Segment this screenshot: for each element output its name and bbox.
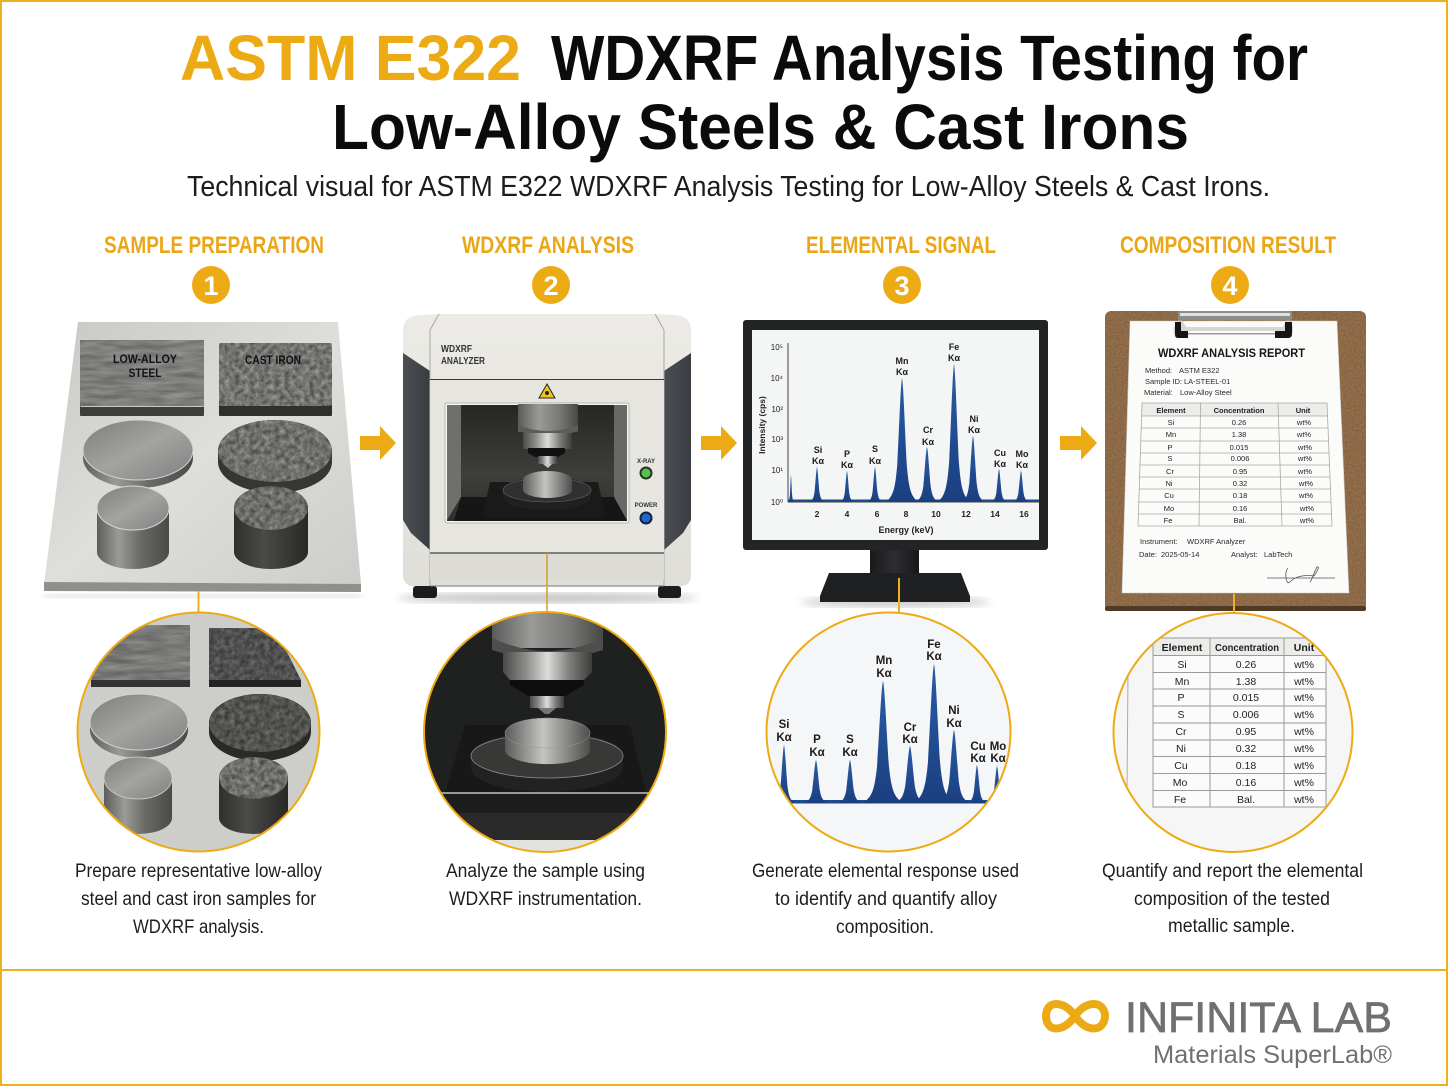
report table: wt% bbox=[1296, 430, 1311, 439]
report footer: Date: bbox=[1139, 550, 1157, 559]
report table: 0.006 bbox=[1231, 454, 1249, 463]
y-axis tick labels: 10⁵ bbox=[771, 343, 783, 352]
peak labels: Cu bbox=[994, 448, 1006, 458]
report table: Ni bbox=[1165, 479, 1173, 488]
zoomed peak labels: Si bbox=[779, 719, 789, 731]
detail circle 4: results table close-up: Mo bbox=[1173, 777, 1187, 789]
detail circle 4: results table close-up: P bbox=[1177, 692, 1185, 704]
detail circle 4: results table close-up: Concentration bbox=[1215, 642, 1279, 654]
peak labels: Kα bbox=[922, 437, 934, 447]
report table: 0.18 bbox=[1233, 491, 1247, 500]
illustration: clipboard with analysis report bbox=[1105, 311, 1366, 611]
measuring head bbox=[492, 613, 603, 648]
detail circle 4: results table close-up: wt% bbox=[1293, 692, 1314, 704]
report metadata: Method: bbox=[1145, 366, 1172, 375]
zoomed peak labels: Ni bbox=[948, 705, 960, 717]
report footer bbox=[1139, 537, 1292, 559]
peak labels: Kα bbox=[869, 456, 881, 466]
iron cylinder close-up bbox=[219, 757, 288, 834]
zoomed peak labels: Kα bbox=[970, 753, 986, 765]
turntable bbox=[471, 732, 623, 792]
step 4 heading: COMPOSITION RESULT bbox=[1120, 232, 1336, 259]
report footer: Analyst: bbox=[1231, 550, 1258, 559]
caption step 1: steel and cast iron samples for bbox=[81, 889, 317, 910]
detail circle 4: results table close-up: wt% bbox=[1293, 760, 1314, 772]
report table: Element bbox=[1156, 406, 1186, 415]
logo bbox=[1046, 994, 1393, 1069]
zoomed peak labels: Kα bbox=[946, 718, 962, 730]
x-axis tick labels: 8 bbox=[904, 509, 909, 519]
title: Low-Alloy Steels & Cast Irons bbox=[332, 91, 1189, 163]
report footer: 2025-05-14 bbox=[1161, 550, 1199, 559]
radiation warning icon bbox=[539, 384, 555, 398]
low-alloy steel cylinder bbox=[97, 486, 169, 569]
stage base bbox=[445, 725, 646, 793]
steel cylinder close-up bbox=[104, 782, 172, 834]
badge 3: 3 bbox=[894, 271, 910, 301]
report table: wt% bbox=[1298, 479, 1313, 488]
report footer: Instrument: bbox=[1140, 537, 1178, 546]
caption step 4 bbox=[1102, 861, 1363, 937]
illustration: WDXRF analyzer instrument: ANALYZER bbox=[441, 356, 485, 367]
x-ray indicator bbox=[637, 459, 655, 480]
zoomed peak labels: Cr bbox=[904, 722, 917, 734]
zoomed peak labels: Kα bbox=[990, 753, 1006, 765]
clipboard board bbox=[1105, 311, 1366, 611]
badge 4: 4 bbox=[1222, 271, 1238, 301]
detail circle 4: results table close-up: 0.16 bbox=[1236, 777, 1256, 789]
low-alloy steel block bbox=[80, 340, 204, 416]
report table: 0.95 bbox=[1233, 467, 1247, 476]
detail circle 4: results table close-up: 0.015 bbox=[1233, 692, 1259, 704]
peak labels: Si bbox=[814, 445, 822, 455]
cast iron disc bbox=[218, 420, 332, 493]
zoomed peak labels: Cu bbox=[970, 741, 986, 753]
cast iron block: CAST IRON bbox=[245, 355, 301, 367]
report table: P bbox=[1167, 443, 1173, 452]
peak labels: Ni bbox=[970, 414, 978, 424]
detail circle 4: results table close-up: 0.32 bbox=[1236, 743, 1256, 755]
power indicator: POWER bbox=[635, 503, 658, 509]
caption step 3: Generate elemental response used bbox=[752, 861, 1019, 882]
spectrum chart bbox=[757, 342, 1039, 535]
zoomed peak labels: P bbox=[813, 734, 821, 746]
badge 2: 2 bbox=[543, 271, 559, 301]
report table: wt% bbox=[1299, 504, 1314, 513]
report table: Fe bbox=[1164, 516, 1172, 525]
illustration: sample plate with specimens bbox=[44, 322, 362, 598]
connector line 4 bbox=[1233, 594, 1235, 613]
zoomed peak labels: S bbox=[846, 734, 854, 746]
detail circle 4: results table close-up: wt% bbox=[1293, 794, 1314, 806]
caption step 3 bbox=[752, 861, 1019, 938]
peak labels: Kα bbox=[994, 459, 1006, 469]
report table: 0.015 bbox=[1230, 443, 1248, 452]
detail circle 4: results table close-up: 0.95 bbox=[1236, 726, 1256, 738]
metal clip bbox=[1173, 311, 1293, 338]
x-axis tick labels: 16 bbox=[1019, 509, 1029, 519]
title: ASTM E322 bbox=[180, 22, 521, 94]
step 1 heading: SAMPLE PREPARATION bbox=[104, 232, 324, 259]
caption step 2: WDXRF instrumentation. bbox=[449, 889, 642, 910]
y-axis tick labels: 10² bbox=[771, 405, 783, 414]
report table: Bal. bbox=[1234, 516, 1246, 525]
arrow 2 bbox=[701, 426, 737, 460]
spectrum peaks bbox=[787, 364, 1039, 502]
detail circle 4: results table close-up: 0.006 bbox=[1233, 709, 1259, 721]
report table: wt% bbox=[1297, 443, 1312, 452]
peak labels: Mo bbox=[1016, 449, 1029, 459]
detail circle 4: results table close-up bbox=[1112, 612, 1354, 853]
report table: 0.16 bbox=[1233, 504, 1247, 513]
report metadata bbox=[1144, 366, 1232, 397]
peak labels: Kα bbox=[1016, 460, 1028, 470]
analyzer label: WDXRF bbox=[441, 344, 472, 355]
detail circle 2: measuring head and sample close-up bbox=[420, 605, 670, 858]
steel disc close-up bbox=[90, 726, 188, 758]
subtitle: Technical visual for ASTM E322 WDXRF Analysis Testing for Low-Alloy Steels & Cast Irons. bbox=[187, 171, 1270, 203]
zoomed peak labels: Kα bbox=[809, 747, 825, 759]
report metadata: Low-Alloy Steel bbox=[1180, 388, 1232, 397]
icon: infinity symbol bbox=[1046, 1004, 1105, 1028]
badge 2 bbox=[532, 266, 570, 304]
zoomed peak labels: Kα bbox=[902, 734, 918, 746]
report table: Unit bbox=[1296, 406, 1311, 415]
illustration: monitor with XRF spectrum bbox=[743, 320, 1048, 607]
low-alloy steel block: LOW-ALLOY bbox=[113, 354, 177, 366]
x-axis tick labels: 6 bbox=[875, 509, 880, 519]
report table: wt% bbox=[1297, 467, 1312, 476]
zoomed peak labels: Kα bbox=[842, 747, 858, 759]
report table: wt% bbox=[1298, 491, 1313, 500]
y-axis tick labels bbox=[771, 343, 784, 507]
x-axis tick labels: 14 bbox=[990, 509, 1000, 519]
title bbox=[180, 22, 1308, 163]
paper bbox=[1122, 321, 1349, 593]
report table: Mn bbox=[1166, 430, 1176, 439]
report table: wt% bbox=[1296, 418, 1311, 427]
caption step 2: Analyze the sample using bbox=[446, 861, 645, 882]
detail circle 4: results table close-up: Cu bbox=[1174, 760, 1188, 772]
detail circle 4: results table close-up: 1.38 bbox=[1236, 676, 1256, 688]
peak labels: Kα bbox=[812, 456, 824, 466]
zoomed peak labels: Kα bbox=[926, 651, 942, 663]
peak labels: Kα bbox=[948, 353, 960, 363]
y-axis title: Intensity (cps) bbox=[757, 396, 767, 454]
x-axis title: Energy (keV) bbox=[878, 525, 934, 535]
monitor bezel bbox=[743, 320, 1048, 550]
peak labels: Cr bbox=[923, 425, 933, 435]
cast iron cylinder bbox=[234, 486, 308, 569]
report table: 0.32 bbox=[1233, 479, 1247, 488]
detail circle 4: results table close-up: Element bbox=[1162, 642, 1203, 654]
connector line 2 bbox=[546, 553, 548, 612]
caption step 4: composition of the tested bbox=[1134, 889, 1330, 910]
y-axis tick labels: 10⁰ bbox=[771, 498, 783, 507]
detail circle 3: spectrum close-up bbox=[760, 608, 1020, 858]
report metadata: Sample ID: bbox=[1145, 377, 1182, 386]
detail circle 4: results table close-up: wt% bbox=[1293, 743, 1314, 755]
x-axis tick labels: 2 bbox=[815, 509, 820, 519]
report metadata: Material: bbox=[1144, 388, 1173, 397]
arrow 3 bbox=[1060, 426, 1097, 460]
y-axis tick labels: 10¹ bbox=[771, 466, 783, 475]
step 2 heading: WDXRF ANALYSIS bbox=[462, 232, 634, 259]
zoomed peak labels: Kα bbox=[776, 732, 792, 744]
report table: Cu bbox=[1164, 491, 1174, 500]
connector line 1 bbox=[198, 591, 200, 613]
x-axis tick labels: 4 bbox=[845, 509, 850, 519]
logo tagline: Materials SuperLab® bbox=[1153, 1041, 1393, 1069]
detail circle 4: results table close-up: Ni bbox=[1176, 743, 1186, 755]
report table: Cr bbox=[1166, 467, 1174, 476]
detail circle 4: results table close-up: wt% bbox=[1293, 709, 1314, 721]
report metadata: ASTM E322 bbox=[1179, 366, 1219, 375]
monitor screen bbox=[752, 330, 1039, 540]
report table: S bbox=[1167, 454, 1173, 463]
monitor stand bbox=[820, 549, 970, 602]
peak labels: P bbox=[844, 449, 850, 459]
cast iron block bbox=[219, 343, 332, 416]
report table: Concentration bbox=[1214, 406, 1265, 415]
report table: wt% bbox=[1297, 454, 1312, 463]
zoomed peak labels: Mn bbox=[876, 655, 892, 667]
steel plate close-up bbox=[91, 680, 190, 687]
power indicator bbox=[635, 503, 658, 524]
report table: wt% bbox=[1299, 516, 1314, 525]
report table: Si bbox=[1168, 418, 1175, 427]
peak labels: S bbox=[872, 444, 878, 454]
report table: 1.38 bbox=[1232, 430, 1246, 439]
zoomed peak labels: Fe bbox=[927, 639, 941, 651]
sample stage bbox=[482, 471, 606, 518]
detail circle 1: specimens close-up bbox=[76, 612, 320, 852]
iron disc close-up bbox=[209, 694, 311, 761]
y-axis tick labels: 10³ bbox=[771, 435, 783, 444]
detail circle 4: results table close-up: 0.26 bbox=[1236, 659, 1256, 671]
detail circle 4: results table close-up: wt% bbox=[1293, 676, 1314, 688]
detail circle 4: results table close-up: Cr bbox=[1175, 726, 1187, 738]
x-ray indicator: X-RAY bbox=[637, 459, 655, 465]
illustration: WDXRF analyzer instrument bbox=[397, 314, 697, 603]
axes bbox=[788, 343, 1039, 502]
badge 1 bbox=[192, 266, 230, 304]
zoomed peaks bbox=[770, 664, 1010, 804]
peak labels: Fe bbox=[949, 342, 959, 352]
detail circle 4: results table close-up: 0.18 bbox=[1236, 760, 1256, 772]
badge 1: 1 bbox=[203, 271, 219, 301]
peak labels bbox=[812, 342, 1029, 470]
title: WDXRF Analysis Testing for bbox=[551, 22, 1308, 94]
case bbox=[403, 314, 691, 586]
report table bbox=[1138, 403, 1332, 526]
detail circle 4: results table close-up: Fe bbox=[1174, 794, 1186, 806]
sample disc bbox=[505, 718, 590, 764]
zoomed peak labels bbox=[776, 639, 1006, 765]
low-alloy steel block: STEEL bbox=[128, 368, 162, 380]
detail circle 4: results table close-up: wt% bbox=[1293, 659, 1314, 671]
report title: WDXRF ANALYSIS REPORT bbox=[1158, 348, 1305, 360]
y-axis tick labels: 10⁴ bbox=[771, 374, 784, 383]
caption step 4: Quantify and report the elemental bbox=[1102, 861, 1363, 882]
report table: Mo bbox=[1164, 504, 1174, 513]
x-axis tick labels: 12 bbox=[961, 509, 971, 519]
x-axis tick labels bbox=[815, 509, 1029, 519]
zoomed peak labels: Mo bbox=[990, 741, 1006, 753]
badge 4 bbox=[1211, 266, 1249, 304]
detail circle 4: results table close-up: wt% bbox=[1293, 726, 1314, 738]
detail circle 4: results table close-up: Bal. bbox=[1237, 794, 1255, 806]
x-axis tick labels: 10 bbox=[931, 509, 941, 519]
report metadata: LA-STEEL-01 bbox=[1184, 377, 1230, 386]
detail circle 4: results table close-up: Mn bbox=[1175, 676, 1189, 688]
report footer: WDXRF Analyzer bbox=[1187, 537, 1246, 546]
peak labels: Kα bbox=[896, 367, 908, 377]
measuring head bbox=[518, 404, 578, 468]
low-alloy steel disc bbox=[83, 420, 193, 488]
step 3 heading: ELEMENTAL SIGNAL bbox=[806, 232, 996, 259]
arrow 1 bbox=[360, 426, 396, 460]
peak labels: Kα bbox=[968, 425, 980, 435]
caption step 3: to identify and quantify alloy bbox=[775, 889, 997, 910]
report footer: LabTech bbox=[1264, 550, 1292, 559]
logo wordmark: INFINITA LAB bbox=[1125, 994, 1392, 1042]
caption step 1 bbox=[75, 861, 322, 938]
detail circle 4: results table close-up: wt% bbox=[1293, 777, 1314, 789]
detail circle 4: results table close-up: Unit bbox=[1294, 642, 1315, 654]
peak labels: Kα bbox=[841, 460, 853, 470]
peak labels: Mn bbox=[896, 356, 908, 366]
detail circle 4: results table close-up: Si bbox=[1177, 659, 1187, 671]
caption step 2 bbox=[446, 861, 645, 910]
caption step 3: composition. bbox=[836, 917, 934, 938]
zoomed table bbox=[1153, 638, 1326, 655]
caption step 4: metallic sample. bbox=[1168, 916, 1295, 937]
zoomed peak labels: Kα bbox=[876, 668, 892, 680]
report table: 0.26 bbox=[1232, 418, 1246, 427]
detail circle 4: results table close-up: S bbox=[1177, 709, 1185, 721]
iron plate close-up bbox=[209, 680, 301, 687]
connector line 3 bbox=[898, 578, 900, 613]
feet bbox=[413, 586, 681, 598]
badge 3 bbox=[883, 266, 921, 304]
caption step 1: WDXRF analysis. bbox=[133, 917, 264, 938]
sample chamber window bbox=[445, 403, 629, 523]
caption step 1: Prepare representative low-alloy bbox=[75, 861, 322, 882]
signature bbox=[1267, 567, 1335, 583]
